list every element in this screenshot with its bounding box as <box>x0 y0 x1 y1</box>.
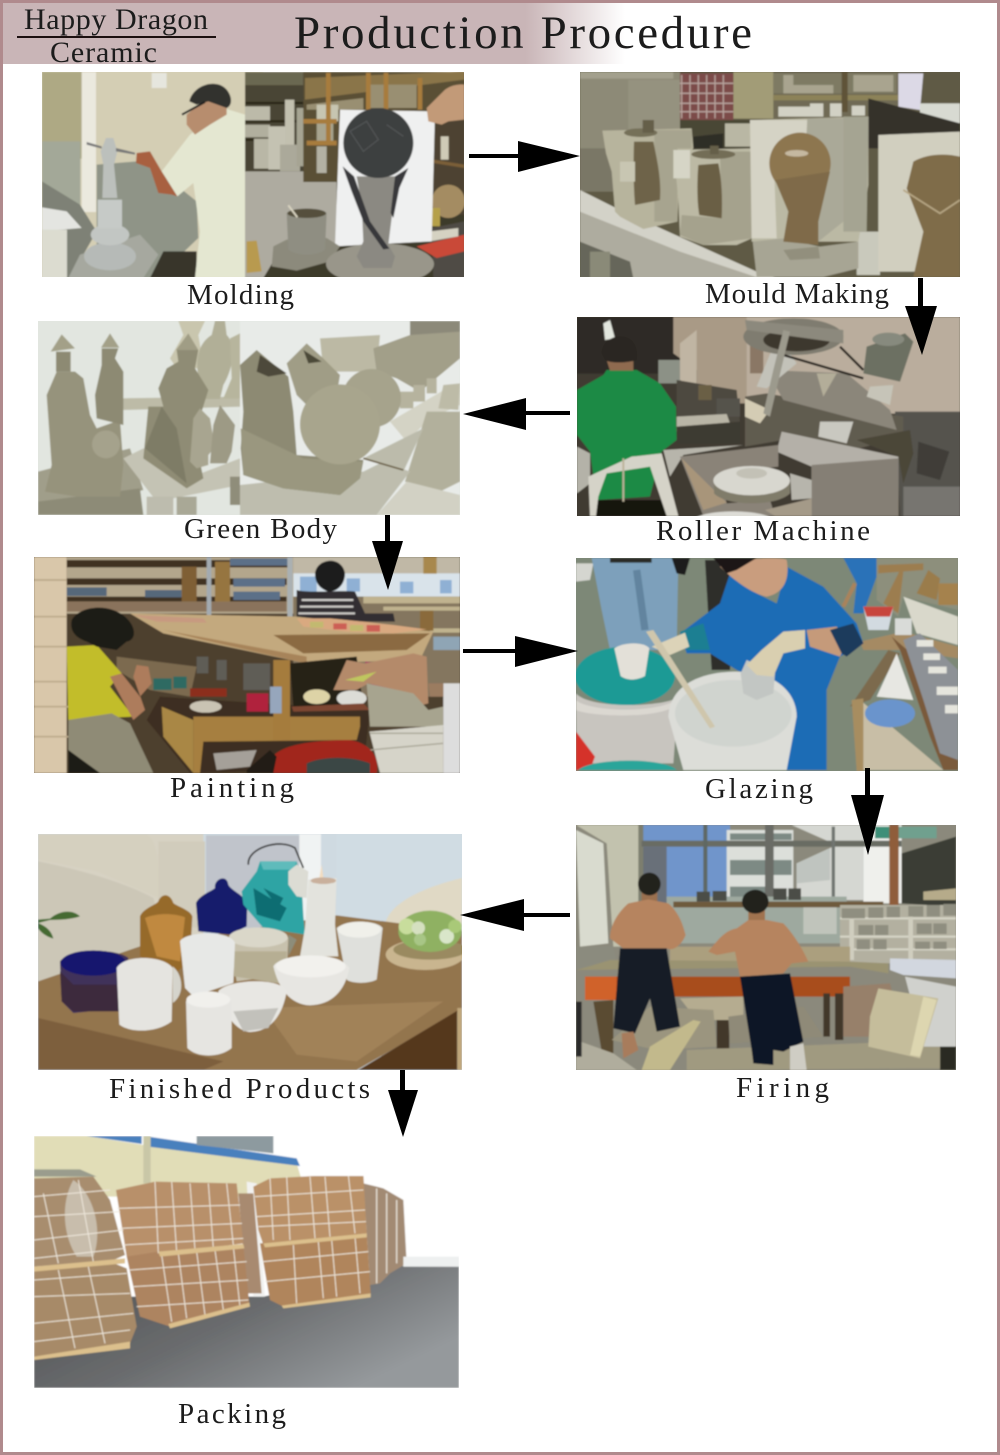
panel: mould making photo <box>580 72 960 277</box>
caption: Green Body: Green Body <box>184 513 338 545</box>
panel: finished products photo <box>38 834 462 1070</box>
caption: Glazing: Glazing <box>705 773 813 805</box>
panel: firing photo <box>576 825 956 1070</box>
company name: Happy Dragon Ceramic <box>17 3 216 69</box>
title: Production Procedure <box>294 7 752 59</box>
caption: Firing: Firing <box>736 1072 829 1104</box>
company name: Happy Dragon Ceramic: Ceramic <box>50 36 157 69</box>
caption: Molding: Molding <box>187 279 294 311</box>
caption: Mould Making: Mould Making <box>705 278 889 310</box>
arrow: finished products to packing <box>388 1070 418 1137</box>
header band <box>3 3 625 64</box>
arrow: roller machine to green body <box>463 398 570 430</box>
caption: Packing: Packing <box>178 1398 286 1430</box>
panel: roller machine photo <box>577 317 960 516</box>
arrow: mould making to roller machine <box>905 278 937 355</box>
arrow: green body to painting <box>372 515 403 590</box>
arrow: glazing to firing <box>851 768 884 855</box>
company name: Happy Dragon Ceramic: Happy Dragon <box>24 3 208 36</box>
panel: green body photo <box>38 321 460 515</box>
arrow: painting to glazing <box>463 636 578 667</box>
arrow: molding to mould making <box>469 141 580 172</box>
caption: Roller Machine: Roller Machine <box>656 515 870 547</box>
panel: molding photo <box>42 72 464 277</box>
panel: glazing photo <box>576 558 958 771</box>
caption: Finished Products: Finished Products <box>109 1073 370 1105</box>
panel: packing photo <box>34 1136 459 1388</box>
arrow: firing to finished products <box>460 899 570 931</box>
panel: painting photo <box>34 557 460 773</box>
caption: Painting: Painting <box>170 772 294 804</box>
